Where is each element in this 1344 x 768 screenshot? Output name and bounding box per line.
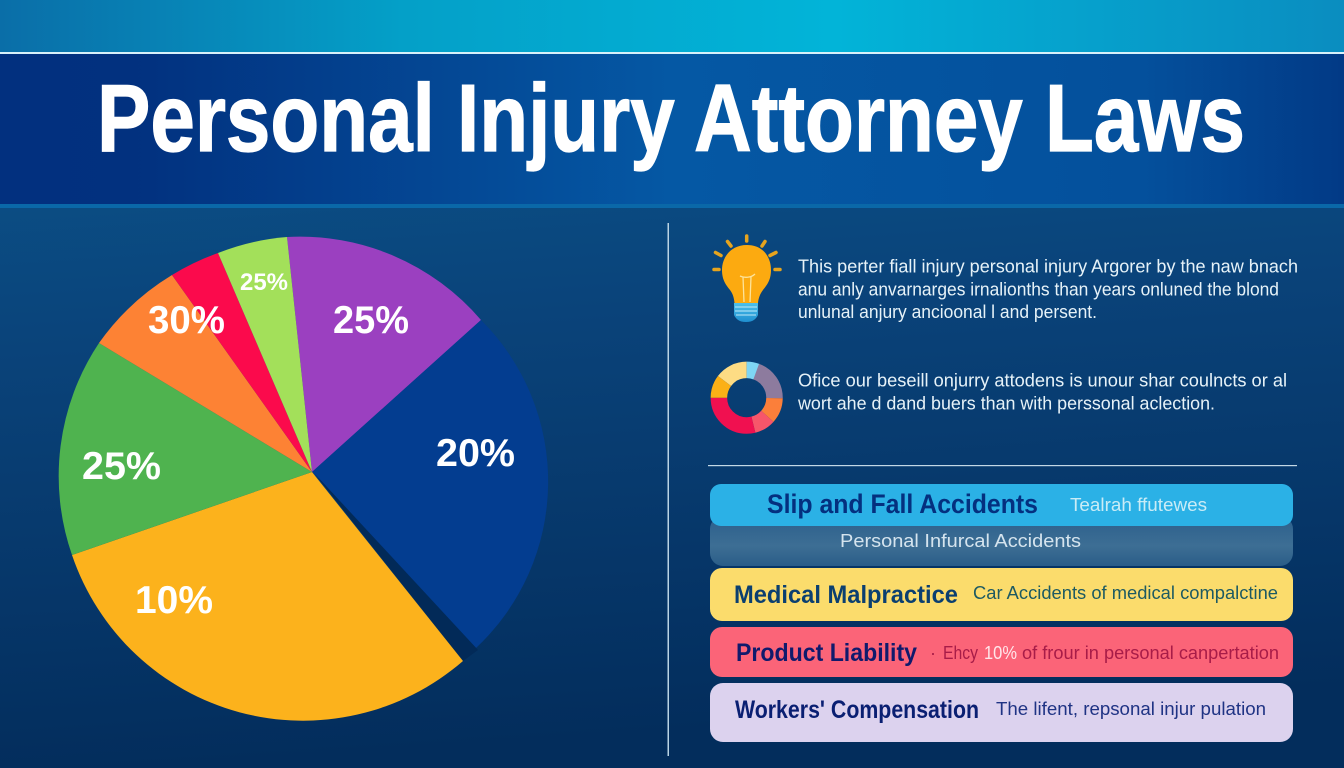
text block: second paragraph: wort ahe d dand buers than with perssonal aclection. (797, 394, 1215, 414)
row: medical malpractice: Car Accidents of medical compalctine (973, 583, 1278, 603)
row: product liability: Product Liability (736, 639, 917, 667)
top cyan band (0, 0, 1344, 52)
label: 25% light green: 25% (240, 269, 288, 296)
horizontal divider (708, 465, 1297, 466)
row: workers' compensation: Workers' Compensation (735, 696, 979, 724)
label: 25% purple: 25% (333, 299, 409, 342)
row: workers' compensation: The lifent, repsonal injur pulation (996, 699, 1266, 719)
row: slip and fall accidents: Slip and Fall Accidents (767, 489, 1038, 519)
row: product liability: of frour in personal canpertation (1022, 643, 1279, 663)
vertical divider (668, 223, 669, 756)
text block: first paragraph: This perter fiall injury personal injury Argorer by the naw bnach (798, 256, 1298, 276)
label: 25% green: 25% (82, 445, 161, 488)
text block: first paragraph: unlunal anjury ancioonal l and persent. (798, 302, 1097, 322)
text block: first paragraph: anu anly anvarnarges irnalionths than years onluned the blond (798, 280, 1279, 300)
slice: amber (72, 472, 463, 721)
row: personal injurial accidents: Personal Infurcal Accidents (840, 531, 1081, 551)
row: product liability (710, 627, 1293, 677)
pie chart (59, 237, 548, 721)
slice: orange (99, 275, 312, 472)
label: 30% orange: 30% (148, 299, 225, 342)
row: medical malpractice: Medical Malpractice (734, 581, 958, 609)
icon: light bulb (714, 236, 780, 322)
header banner (0, 52, 1344, 208)
row: slip and fall accidents (710, 484, 1293, 526)
slice: crimson (172, 253, 312, 472)
row: workers' compensation (710, 683, 1293, 742)
slice: green (59, 343, 312, 555)
text block: first paragraph (798, 256, 1298, 322)
icon: donut chart (719, 370, 774, 426)
row: product liability: 10% (984, 643, 1017, 663)
row: slip and fall accidents: Tealrah ffutewes (1070, 495, 1207, 515)
row: medical malpractice (710, 568, 1293, 621)
slice: navy blue (312, 320, 548, 648)
text block: second paragraph: Ofice our beseill onjurry attodens is unour shar coulncts or al (798, 370, 1287, 390)
row: personal injurial accidents (710, 516, 1293, 566)
text block: second paragraph (797, 370, 1287, 414)
row: product liability: Ehcy (943, 643, 978, 663)
slice: light green (218, 237, 312, 472)
row: product liability: · (930, 643, 936, 663)
slice: purple (287, 237, 481, 472)
slice shadow (314, 473, 478, 661)
label: 10% amber: 10% (135, 579, 213, 622)
label: 20% navy: 20% (436, 432, 515, 475)
